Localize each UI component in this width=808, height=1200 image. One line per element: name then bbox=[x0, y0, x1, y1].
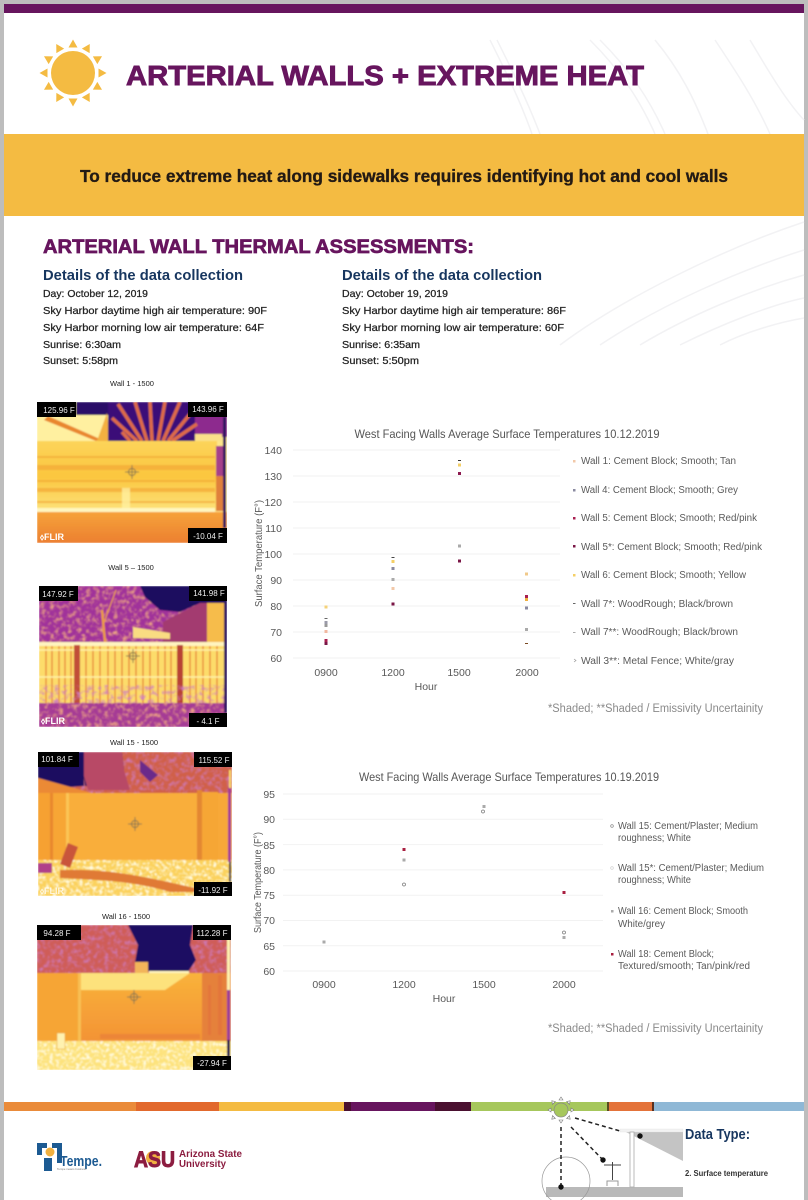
thermal image: wall 15 bbox=[38, 752, 232, 896]
labels: 141.98 F bbox=[193, 589, 225, 598]
logo: Arizona State University bbox=[134, 1147, 242, 1172]
details column 1: Day: October 12, 2019 bbox=[43, 288, 148, 300]
labels: 101.84 F bbox=[41, 755, 73, 764]
y axis labels: 60 bbox=[263, 966, 275, 978]
details column 2: Sunrise: 6:35am bbox=[342, 339, 420, 351]
labels: 94.28 F bbox=[43, 929, 71, 938]
thermal image: wall 1 bbox=[37, 402, 227, 543]
legend: Wall 18: Cement Block; bbox=[618, 949, 714, 960]
y axis labels: 85 bbox=[263, 840, 275, 852]
logo: Arizona State University: University bbox=[179, 1158, 226, 1170]
logo: Arizona State University: Arizona State bbox=[179, 1148, 242, 1160]
y axis title: Surface Temperature (F°) bbox=[253, 500, 265, 607]
details column 1 bbox=[43, 268, 267, 367]
labels: 143.96 F bbox=[192, 405, 224, 414]
x axis labels: 1200 bbox=[381, 667, 405, 679]
icon: sun bbox=[40, 40, 106, 106]
details column 1: Sky Harbor daytime high air temperature: 90F bbox=[43, 305, 267, 317]
y axis labels bbox=[264, 445, 282, 665]
labels: ⬨FLIR bbox=[40, 716, 66, 726]
legend: Wall 4: Cement Block; Smooth; Grey bbox=[581, 485, 738, 496]
bottom colour bar bbox=[4, 1102, 804, 1111]
details column 1: Sunrise: 6:30am bbox=[43, 339, 121, 351]
x axis labels: 2000 bbox=[515, 667, 539, 679]
logo: Tempe bbox=[37, 1143, 102, 1171]
details column 2: Sky Harbor morning low air temperature: 60F bbox=[342, 322, 564, 334]
legend: Wall 15*: Cement/Plaster; Medium bbox=[618, 863, 764, 874]
y axis labels: 90 bbox=[270, 575, 282, 587]
labels: - 4.1 F bbox=[196, 717, 220, 726]
y axis labels: 100 bbox=[264, 549, 282, 561]
labels: -10.04 F bbox=[193, 532, 223, 541]
chart: West Facing Walls 10.19.2019 bbox=[252, 770, 764, 1035]
logo: Arizona State University: ASU bbox=[134, 1147, 175, 1172]
icon: small sun outline bbox=[548, 1097, 574, 1123]
thermal image: wall 16 bbox=[37, 925, 231, 1070]
x axis labels bbox=[312, 979, 576, 991]
labels: -11.92 F bbox=[198, 886, 228, 895]
top purple bar bbox=[4, 4, 804, 13]
y axis labels: 60 bbox=[270, 653, 282, 665]
diagram: surface temperature measurement bbox=[542, 1097, 683, 1200]
y axis labels: 130 bbox=[264, 471, 282, 483]
y axis labels: 70 bbox=[270, 627, 282, 639]
labels bbox=[39, 586, 227, 727]
details column 2: Day: October 19, 2019 bbox=[342, 288, 448, 300]
details column 2: Sunset: 5:50pm bbox=[342, 355, 419, 367]
y axis labels: 80 bbox=[263, 865, 275, 877]
title: ARTERIAL WALLS + EXTREME HEAT bbox=[126, 60, 644, 91]
x axis title: Hour bbox=[433, 993, 456, 1005]
details column 2 bbox=[342, 268, 566, 367]
legend: Wall 6: Cement Block; Smooth; Yellow bbox=[581, 570, 747, 581]
labels bbox=[38, 752, 232, 896]
labels bbox=[37, 402, 227, 543]
data points bbox=[322, 805, 566, 944]
labels: 112.28 F bbox=[197, 929, 228, 938]
legend: Wall 15: Cement/Plaster; Medium bbox=[618, 821, 758, 832]
caption: wall 15: Wall 15 - 1500 bbox=[110, 738, 158, 747]
details column 2: Details of the data collection bbox=[342, 268, 542, 284]
data type heading: Data Type: bbox=[685, 1126, 750, 1143]
chart title: West Facing Walls Average Surface Temperatures 10.12.2019 bbox=[354, 427, 660, 441]
y axis labels: 140 bbox=[264, 445, 282, 457]
data points bbox=[324, 460, 528, 645]
legend: Wall 7*: WoodRough; Black/brown bbox=[581, 599, 733, 610]
x axis labels: 0900 bbox=[312, 979, 336, 991]
details column 1: Sky Harbor morning low air temperature: 64F bbox=[43, 322, 264, 334]
y axis title: Surface Temperature (F°) bbox=[252, 832, 264, 933]
legend: Textured/smooth; Tan/pink/red bbox=[618, 961, 750, 972]
legend bbox=[611, 821, 764, 972]
section heading: ARTERIAL WALL THERMAL ASSESSMENTS: bbox=[43, 236, 474, 258]
labels: ⬨FLIR bbox=[39, 532, 65, 542]
y axis labels: 80 bbox=[270, 601, 282, 613]
x axis labels: 1200 bbox=[392, 979, 416, 991]
details column 2: Sky Harbor daytime high air temperature: 86F bbox=[342, 305, 566, 317]
chart title: West Facing Walls Average Surface Temperatures 10.19.2019 bbox=[359, 770, 659, 784]
details column 1: Sunset: 5:58pm bbox=[43, 355, 118, 367]
legend: Wall 1: Cement Block; Smooth; Tan bbox=[581, 456, 736, 467]
x axis labels: 2000 bbox=[552, 979, 576, 991]
y axis labels: 110 bbox=[265, 523, 282, 535]
legend: Wall 5*: Cement Block; Smooth; Red/pink bbox=[581, 542, 763, 553]
footnote: *Shaded; **Shaded / Emissivity Uncertainity bbox=[548, 1023, 763, 1035]
labels: 115.52 F bbox=[199, 756, 230, 765]
details column 1: Details of the data collection bbox=[43, 268, 243, 284]
labels bbox=[37, 925, 231, 1070]
x axis labels bbox=[314, 667, 539, 679]
banner bbox=[4, 134, 804, 216]
legend: roughness; White bbox=[618, 875, 691, 886]
logo: Tempe: Tempe. bbox=[60, 1154, 102, 1170]
legend bbox=[573, 456, 763, 667]
data type item: 2. Surface temperature bbox=[685, 1169, 769, 1178]
legend: Wall 7**: WoodRough; Black/brown bbox=[581, 627, 738, 638]
x axis labels: 0900 bbox=[314, 667, 338, 679]
y axis labels: 70 bbox=[263, 915, 275, 927]
logo: Tempe: Tempe means business bbox=[57, 1167, 87, 1171]
x axis title: Hour bbox=[415, 681, 438, 693]
labels: 125.96 F bbox=[43, 406, 75, 415]
chart: West Facing Walls 10.12.2019 bbox=[253, 427, 763, 715]
y axis labels: 65 bbox=[263, 941, 275, 953]
y axis labels: 75 bbox=[263, 890, 275, 902]
x axis labels: 1500 bbox=[472, 979, 496, 991]
thermal image: wall 5 bbox=[39, 586, 227, 727]
x axis labels: 1500 bbox=[447, 667, 471, 679]
caption: wall 5: Wall 5 – 1500 bbox=[108, 563, 154, 572]
legend: Wall 3**: Metal Fence; White/gray bbox=[581, 656, 734, 667]
y axis labels bbox=[263, 789, 275, 978]
banner text: To reduce extreme heat along sidewalks requires identifying hot and cool walls bbox=[80, 166, 728, 186]
legend: White/grey bbox=[618, 919, 665, 930]
caption: wall 1: Wall 1 - 1500 bbox=[110, 379, 154, 388]
caption: wall 16: Wall 16 - 1500 bbox=[102, 912, 150, 921]
y axis labels: 95 bbox=[263, 789, 275, 801]
labels: ⬨FLIR bbox=[39, 886, 65, 896]
y axis labels: 120 bbox=[264, 497, 282, 509]
legend: Wall 16: Cement Block; Smooth bbox=[618, 906, 748, 917]
labels: -27.94 F bbox=[197, 1059, 227, 1068]
footnote: *Shaded; **Shaded / Emissivity Uncertainity bbox=[548, 703, 763, 715]
labels: 147.92 F bbox=[42, 590, 74, 599]
y axis labels: 90 bbox=[263, 814, 275, 826]
legend: Wall 5: Cement Block; Smooth; Red/pink bbox=[581, 513, 758, 524]
legend: roughness; White bbox=[618, 833, 691, 844]
